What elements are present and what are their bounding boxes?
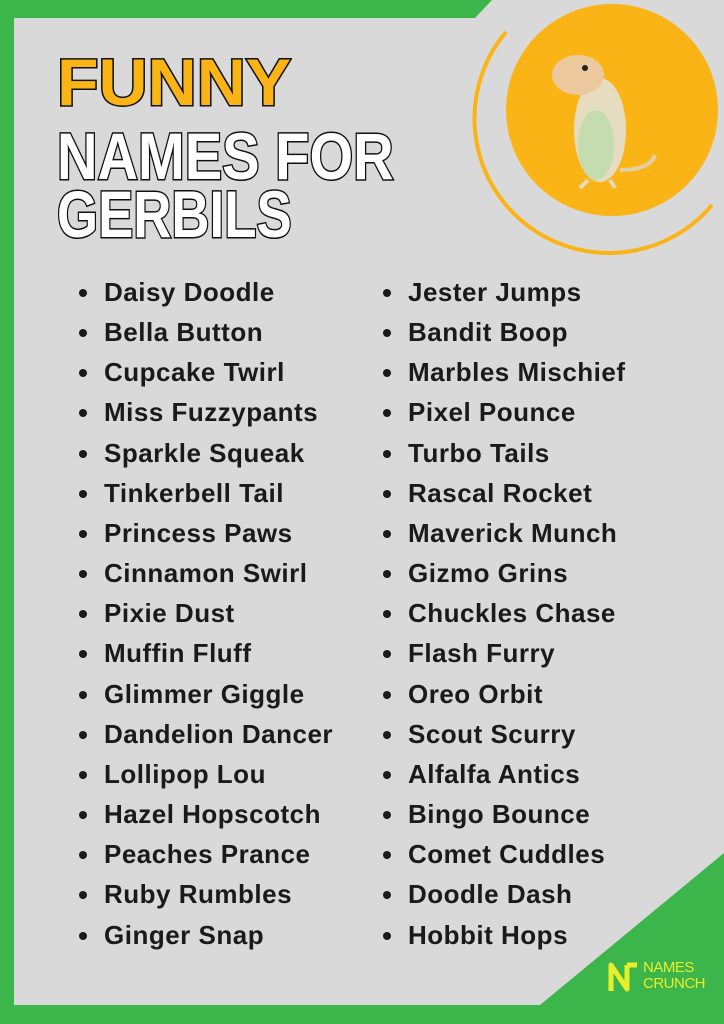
list: column 1: Princess Paws [104,518,293,548]
logo: NAMES [643,959,694,976]
title: GERBILS [57,177,292,251]
logo [608,959,705,992]
list: column 2: Turbo Tails [408,438,550,468]
list: column 2: Scout Scurry [408,719,576,749]
icon: orange arc [474,32,712,253]
list: column 2: Alfalfa Antics [408,759,580,789]
list: column 2: Jester Jumps [408,277,582,307]
list: column 2: Comet Cuddles [408,839,605,869]
list: column 1 [79,277,333,950]
list: column 2: Gizmo Grins [408,558,568,588]
list: column 1: Bella Button [104,317,263,347]
list: column 1: Lollipop Lou [104,759,266,789]
list: column 2: Doodle Dash [408,879,572,909]
list: column 1: Pixie Dust [104,598,235,628]
icon: gerbil [552,55,655,188]
list: column 2: Rascal Rocket [408,478,592,508]
list: column 1: Cupcake Twirl [104,357,285,387]
list: column 2: Bingo Bounce [408,799,590,829]
list: column 2: Oreo Orbit [408,679,543,709]
list: column 2: Hobbit Hops [408,920,568,950]
list: column 1: Tinkerbell Tail [104,478,284,508]
list: column 1: Dandelion Dancer [104,719,333,749]
title [57,45,394,251]
logo: CRUNCH [643,975,705,992]
list: column 2: Bandit Boop [408,317,568,347]
list: column 1: Cinnamon Swirl [104,558,307,588]
list: column 1: Peaches Prance [104,839,310,869]
list: column 1: Hazel Hopscotch [104,799,321,829]
list: column 1: Daisy Doodle [104,277,275,307]
list: column 2: Maverick Munch [408,518,617,548]
list: column 2: Chuckles Chase [408,598,616,628]
list: column 1: Sparkle Squeak [104,438,305,468]
list: column 1: Muffin Fluff [104,638,252,668]
list: column 2: Pixel Pounce [408,397,576,427]
list: column 1: Miss Fuzzypants [104,397,318,427]
list: column 2: Flash Furry [408,638,555,668]
title: FUNNY [57,45,291,119]
list: column 2: Marbles Mischief [408,357,626,387]
icon: orange circle [506,4,718,216]
list: column 2 [383,277,626,950]
list: column 1: Glimmer Giggle [104,679,305,709]
list: column 1: Ginger Snap [104,920,264,950]
title: NAMES FOR [57,119,394,193]
list: column 1: Ruby Rumbles [104,879,292,909]
